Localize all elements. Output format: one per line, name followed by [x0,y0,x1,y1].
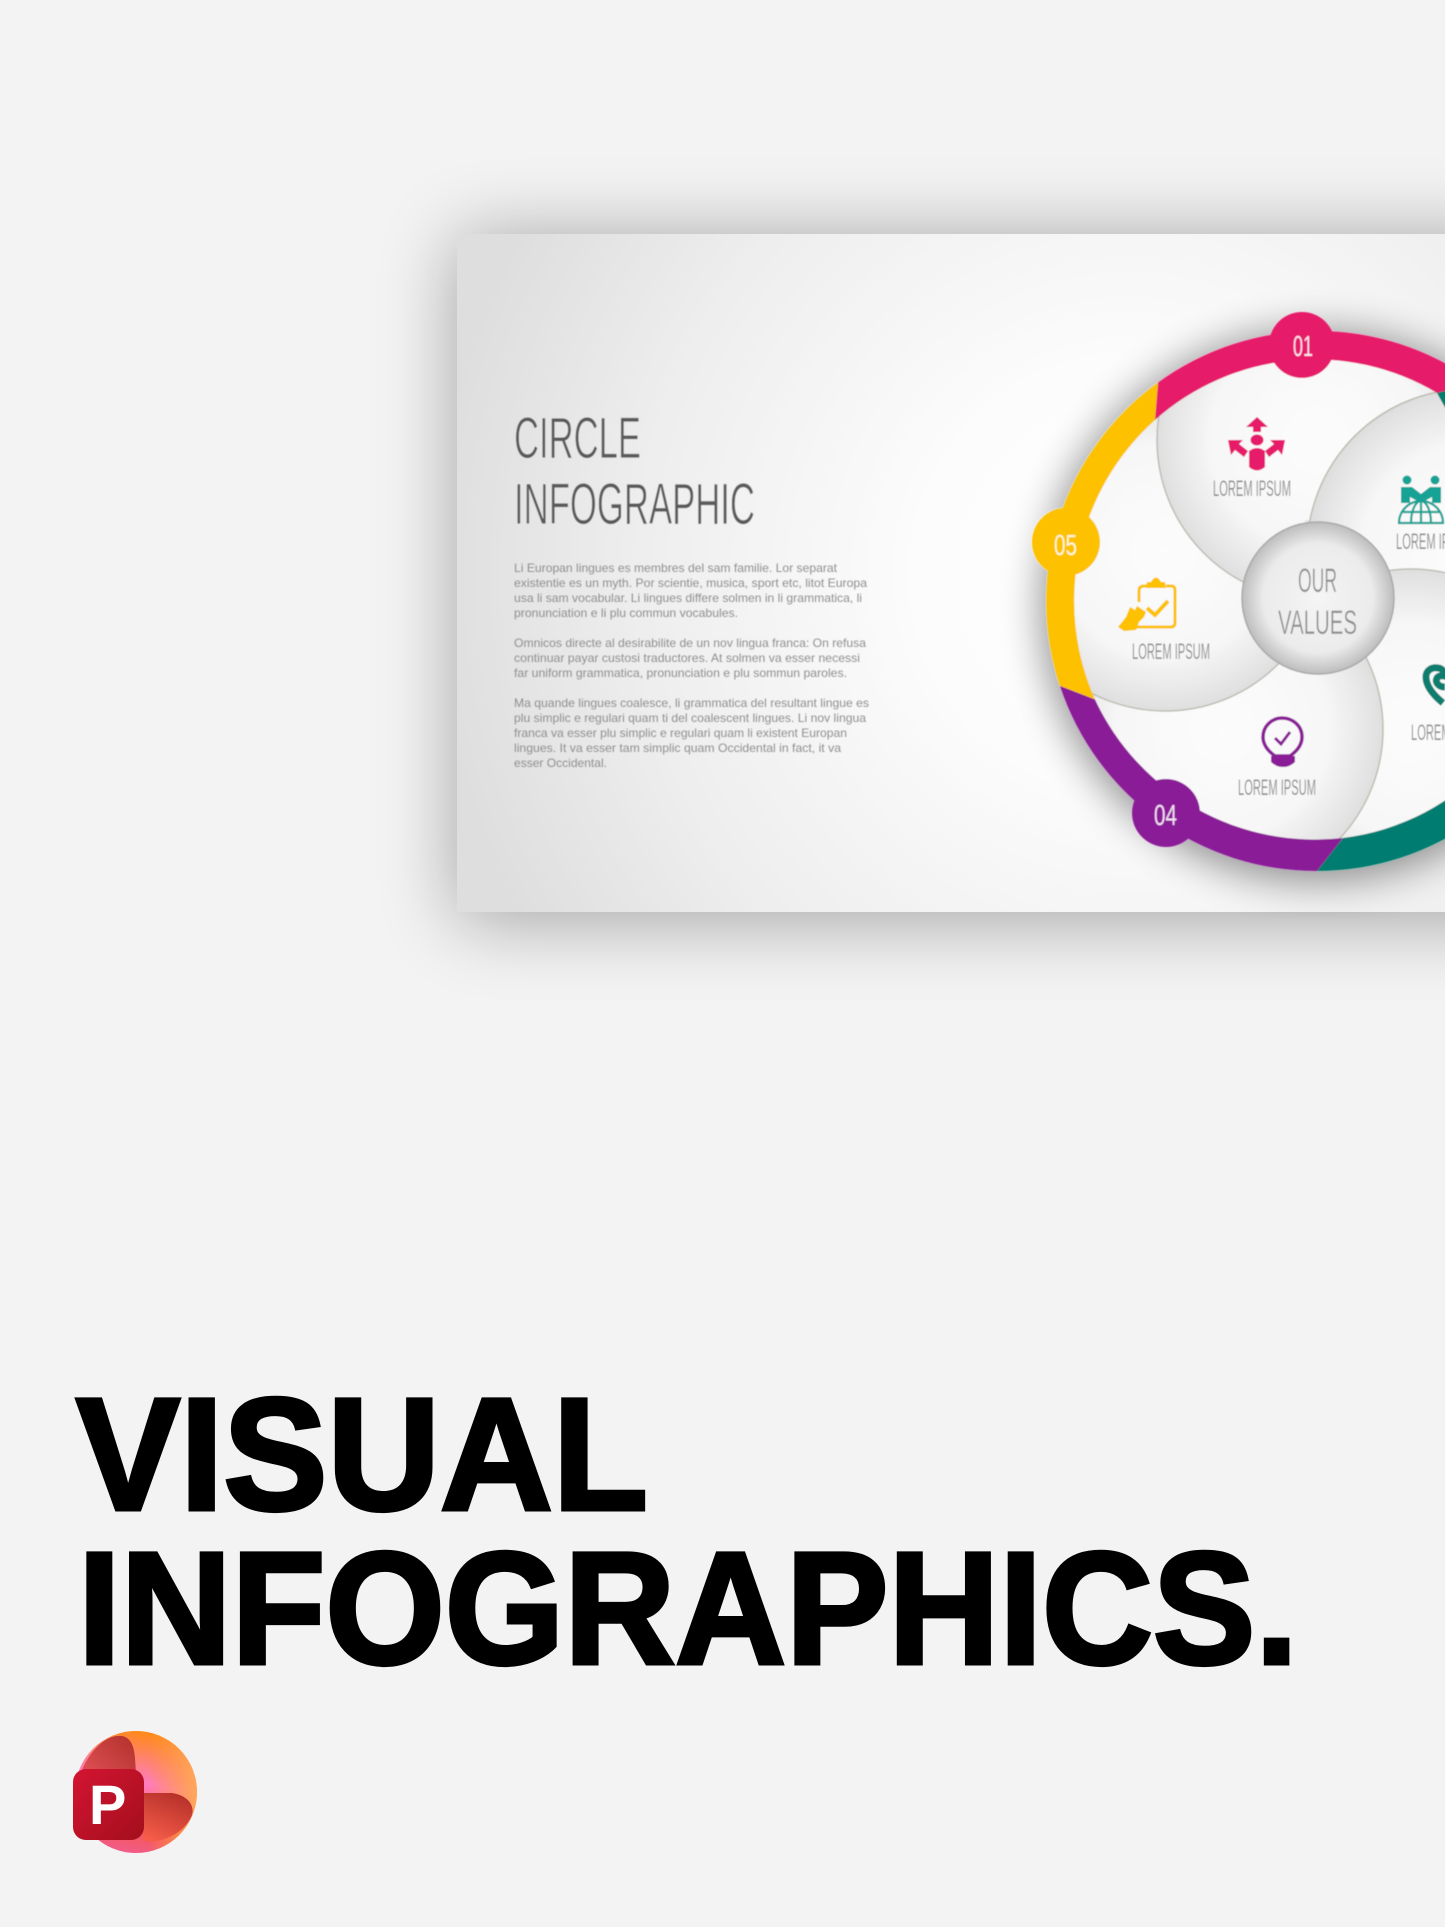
slide body text: continuar payar custosi traductores. At solmen va esser necessi [514,651,860,665]
slide body text: usa li sam vocabular. Li lingues differe solmen in li grammatica, li [514,591,862,605]
petals [1073,359,1445,844]
main heading: VISUAL [76,1364,648,1544]
logo disc [75,1731,197,1853]
slide body text: far uniform grammatica, pronunciation e plu sommun paroles. [514,666,847,680]
badge 05 [1032,508,1100,576]
slide body text: lingues. It va esser tam simplic quam Occidental in fact, it va [514,741,841,755]
label: lorem ipsum purple: LOREM IPSUM [1238,775,1316,800]
label: lorem ipsum yellow: LOREM IPSUM [1132,639,1210,664]
icon: person with arrows [1228,417,1285,470]
main heading [76,1364,1298,1698]
logo upper lobe [80,1736,137,1790]
hub label: OUR [1298,562,1337,600]
slide body text: existentie es un myth. Por scientie, musica, sport etc, litot Europa [514,576,867,590]
ring shadow [1041,330,1445,882]
logo lower lobe [143,1793,193,1842]
slide body text: plu simplic e regulari quam ti del coalescent lingues. Li nov lingua [514,711,866,725]
circle diagram [1005,280,1445,889]
slide body text: franca va esser plu simplic e regulari quam li existent Europan [514,726,847,740]
slide body text: Ma quande lingues coalesce, li grammatica del resultant lingue es [514,696,869,710]
slide title: INFOGRAPHIC [514,472,755,537]
ring segment yellow [1046,383,1158,700]
icon: light bulb [1263,718,1302,767]
badge 04 circle [1132,779,1200,847]
slide title: CIRCLE [514,406,641,471]
slide drop shadow [457,238,1445,920]
badge 01 circle [1269,312,1335,378]
logo square [73,1769,144,1840]
icon: handshake globe [1399,476,1443,523]
label: lorem ipsum pink: LOREM IPSUM [1213,476,1291,501]
badge 01 [1269,312,1335,378]
slide body text: Li Europan lingues es membres del sam familie. Lor separat [514,561,838,575]
slide background [457,234,1445,912]
icon: PowerPoint logo [73,1731,197,1853]
badge 01 number: 01 [1293,331,1313,363]
slide panel [457,234,1445,912]
badge 04 number: 04 [1154,800,1177,832]
main heading: INFOGRAPHICS. [78,1518,1298,1698]
icon: heart target [1426,668,1445,703]
slide body text: pronunciation e li plu commun vocabules. [514,606,738,620]
hub label: VALUES [1278,604,1357,642]
hub label [1278,562,1357,642]
badge 04 [1132,779,1200,847]
badge 05 number: 05 [1054,530,1077,562]
ring segment purple [1060,686,1343,871]
slide contents [514,280,1445,889]
slide body text [514,561,869,770]
centre hub [1242,522,1394,674]
icon: clipboard with hand [1118,578,1175,631]
slide title [514,406,755,537]
ring segment pink [1155,331,1445,420]
logo disc highlight [75,1731,197,1853]
hub circle [1242,522,1394,674]
ring segment teal [1317,383,1445,871]
slide body text: Omnicos directe al desirabilite de un nov lingua franca: On refusa [514,636,866,650]
slide body text: esser Occidental. [514,756,607,770]
badge 05 circle [1032,508,1100,576]
logo letter: P [89,1773,126,1836]
ring inner pink fix [1437,391,1445,398]
